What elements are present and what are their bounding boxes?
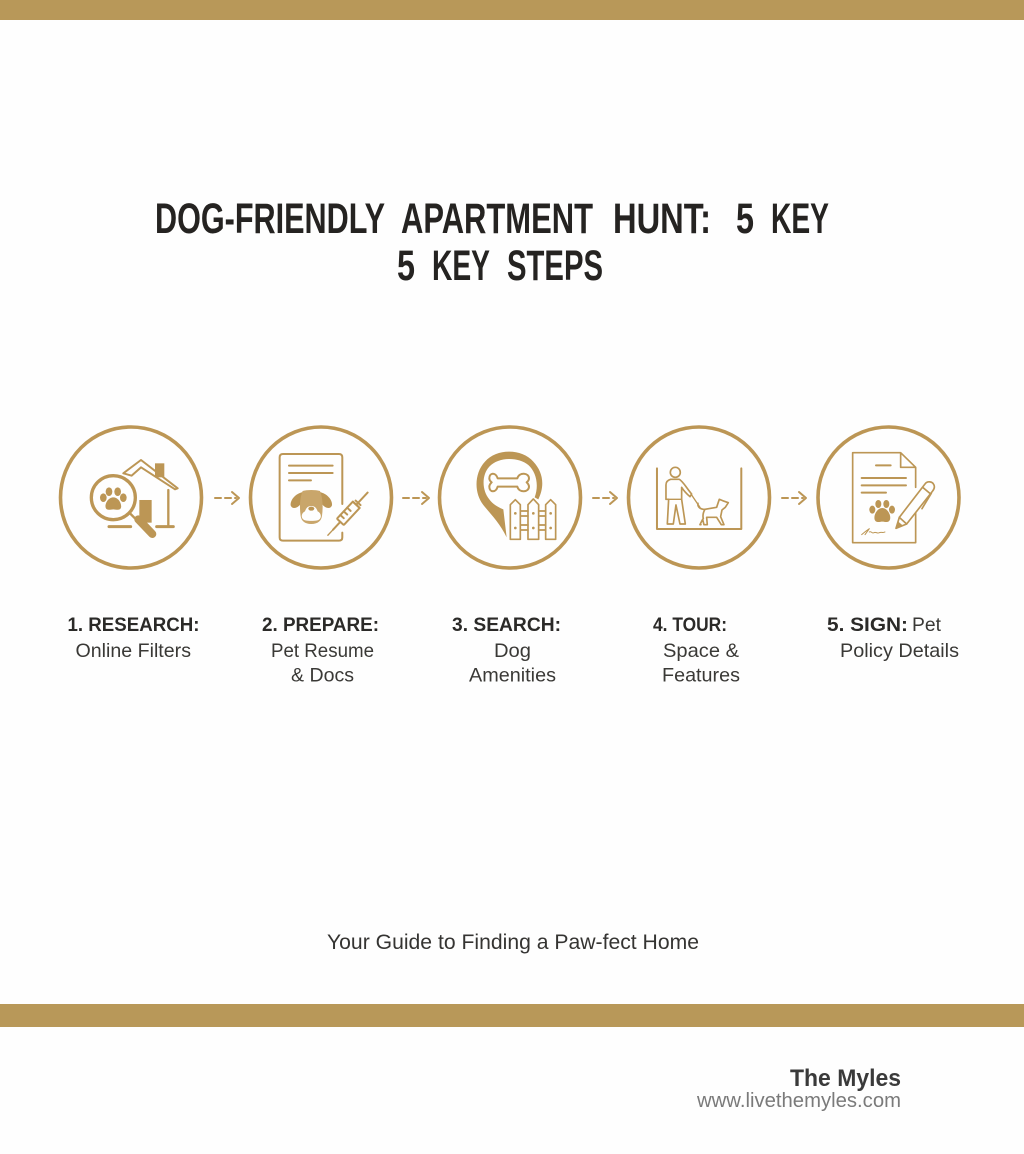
arrow 1	[215, 492, 239, 504]
title: KEY	[771, 195, 829, 243]
arrow 2	[403, 492, 429, 504]
step 4 label: Features	[662, 664, 740, 686]
tagline: Your Guide to Finding a Paw-fect Home	[327, 931, 699, 954]
step 3 label: Amenities	[469, 664, 556, 686]
step 1 label: Online Filters	[76, 640, 191, 662]
title: APARTMENT	[401, 195, 593, 243]
step 3 label: 3. SEARCH:	[452, 615, 561, 636]
footer brand: The Myles	[790, 1065, 901, 1092]
step 5 label: 5. SIGN:	[827, 615, 908, 636]
step 2 label: Pet Resume	[271, 640, 374, 662]
arrow 3	[593, 492, 617, 504]
step 1 icon: magnifier over house	[60, 427, 202, 568]
footer brand	[696, 1065, 901, 1112]
step 3 label	[452, 615, 561, 686]
step 4 label: 4. TOUR:	[653, 615, 727, 636]
step 1 label	[68, 615, 200, 662]
step 5 icon: signed pet policy and pen	[818, 427, 959, 568]
step 4 label: Space &	[663, 640, 739, 662]
step 4 label	[653, 615, 740, 686]
step 2 label: & Docs	[291, 664, 354, 686]
footer brand: www.livethemyles.com	[696, 1090, 901, 1112]
step 5 label	[827, 614, 959, 662]
step 3 label: Dog	[494, 640, 531, 662]
title	[155, 195, 829, 290]
title: 5	[397, 242, 415, 290]
bottom bar	[0, 1004, 1024, 1027]
step 1 label: 1. RESEARCH:	[68, 615, 200, 636]
title: STEPS	[507, 242, 603, 290]
title: DOG-FRIENDLY	[155, 195, 385, 243]
step 2 label: 2. PREPARE:	[262, 615, 379, 636]
title: HUNT:	[613, 195, 711, 243]
top bar	[0, 0, 1024, 20]
step 5 label: Policy Details	[840, 640, 959, 662]
step 3 icon: location pin, bone and fence	[440, 427, 580, 568]
step 2 icon: pet resume and syringe	[250, 427, 392, 568]
step 5 label: Pet	[912, 614, 942, 636]
title: KEY	[432, 242, 490, 290]
arrow 4	[782, 492, 806, 504]
step 2 label	[262, 615, 379, 686]
step 4 icon: person walking a dog in a space	[628, 427, 770, 568]
title: 5	[736, 195, 754, 243]
